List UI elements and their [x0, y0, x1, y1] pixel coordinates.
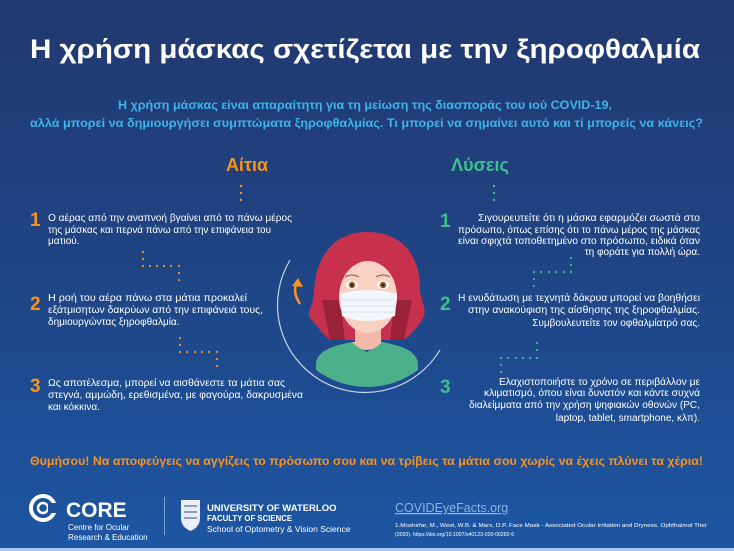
solution 1	[440, 211, 700, 258]
panel: causes	[30, 155, 303, 413]
subtitle	[30, 100, 703, 130]
solution 1: είναι σφιχτά τοποθετημένο στο πρόσωπο, ειδικά όταν	[458, 235, 700, 247]
subtitle: Η χρήση μάσκας είναι απαραίτητη για τη μείωση της διασποράς του ιού COVID-19,	[118, 100, 612, 112]
warning callout: Θυμήσου! Να αποφεύγεις να αγγίζεις το πρόσωπο σου και να τρίβεις τα μάτια σου χωρίς να έχεις πλύνει τα χέρια!	[30, 456, 703, 468]
cause 3: στεγνά, αμμώδη, ερεθισμένα, με φαγούρα, δακρυσμένα	[48, 389, 303, 401]
website and reference: COVIDEyeFacts.org	[395, 501, 508, 515]
solution 3: 3	[440, 377, 451, 398]
logo: University of Waterloo: School of Optometry & Vision Science	[207, 524, 351, 534]
solution 2: 2	[440, 294, 451, 315]
solution 1: 1	[440, 211, 451, 232]
logo: CORE	[31, 496, 148, 542]
logo: CORE: Research & Education	[68, 533, 148, 542]
logo: University of Waterloo: UNIVERSITY OF WATERLOO	[207, 503, 336, 514]
cause 1: 1	[30, 210, 41, 231]
cause 2: Η ροή του αέρα πάνω στα μάτια προκαλεί	[48, 292, 248, 304]
website and reference	[395, 501, 707, 538]
solution 2: Συμβουλευτείτε τον οφθαλμίατρό σας.	[532, 317, 700, 329]
solution 1: πρόσωπο, όπως επίσης ότι το πάνω μέρος της μάσκας	[458, 224, 700, 236]
solution 2: Η ενυδάτωση με τεχνητά δάκρυα μπορεί να βοηθήσει	[458, 292, 700, 304]
cause 2: 2	[30, 294, 41, 315]
cause 2: εξάτμισητων δακρύων από την επιφάνειά τους,	[48, 304, 263, 316]
logo: University of Waterloo: FACULTY OF SCIENCE	[207, 514, 292, 523]
solution 3: κλιματισμό, όπου είναι δυνατόν και κάντε συχνά	[484, 387, 700, 399]
solution 2: στην ανακούφιση της αίσθησης της ξηροφθαλμίας.	[468, 304, 700, 316]
icon: arrow	[295, 282, 300, 304]
solution 3: διαλείμματα από την χρήση ψηφιακών οθονών (PC,	[469, 399, 700, 411]
heading: causes: Αίτια	[226, 155, 268, 175]
solution 2	[440, 292, 700, 329]
website and reference: 1.Moshirfar, M., West, W.B. & Marx, D.P. Face Mask - Associated Ocular Irritation and Dryness. Ophthalmol Ther	[395, 523, 707, 529]
solution 3: Ελαχιστοποιήστε το χρόνο σε περιβάλλον με	[499, 376, 701, 388]
illustration: woman with mask	[278, 232, 440, 392]
cause 1: ματιού.	[48, 235, 80, 247]
heading: solutions: Λύσεις	[451, 155, 509, 175]
cause 1: Ο αέρας από την αναπνοή βγαίνει από το πάνω μέρος	[48, 212, 292, 224]
cause 1: της μάσκας και περνά πάνω από την επιφάνεια του	[48, 224, 271, 236]
solution 3	[440, 376, 701, 424]
cause 2: δημιουργώντας ξηροφθαλμία.	[48, 316, 179, 328]
subtitle: αλλά μπορεί να δημιουργήσει συμπτώματα ξηροφθαλμίας. Τι μπορεί να σημαίνει αυτό και τί μπορείς να κάνεις?	[30, 118, 703, 130]
cause 1	[30, 210, 292, 247]
logo: CORE: Centre for Ocular	[68, 523, 130, 532]
solution 3: laptop, tablet, smartphone, κλπ).	[556, 413, 700, 424]
cause 2	[30, 292, 263, 328]
solution 1: Σιγουρευτείτε ότι η μάσκα εφαρμόζει σωστά στο	[478, 212, 700, 224]
website and reference: (2020). https://doi.org/10.1007/s40123-020-00282-6	[395, 532, 514, 538]
cause 3: και κόκκινα.	[48, 401, 100, 413]
solution 1: τη φοράτε για πολλή ώρα.	[585, 246, 700, 258]
logo: CORE: CORE	[66, 499, 127, 522]
logo: University of Waterloo	[181, 500, 351, 534]
cause 3: 3	[30, 376, 41, 397]
footer	[31, 496, 707, 542]
panel: solutions	[440, 155, 701, 424]
title: Η χρήση μάσκας σχετίζεται με την ξηροφθαλμία	[30, 34, 700, 64]
cause 3: Ως αποτέλεσμα, μπορεί να αισθάνεστε τα μάτια σας	[48, 377, 285, 389]
cause 3	[30, 376, 303, 413]
